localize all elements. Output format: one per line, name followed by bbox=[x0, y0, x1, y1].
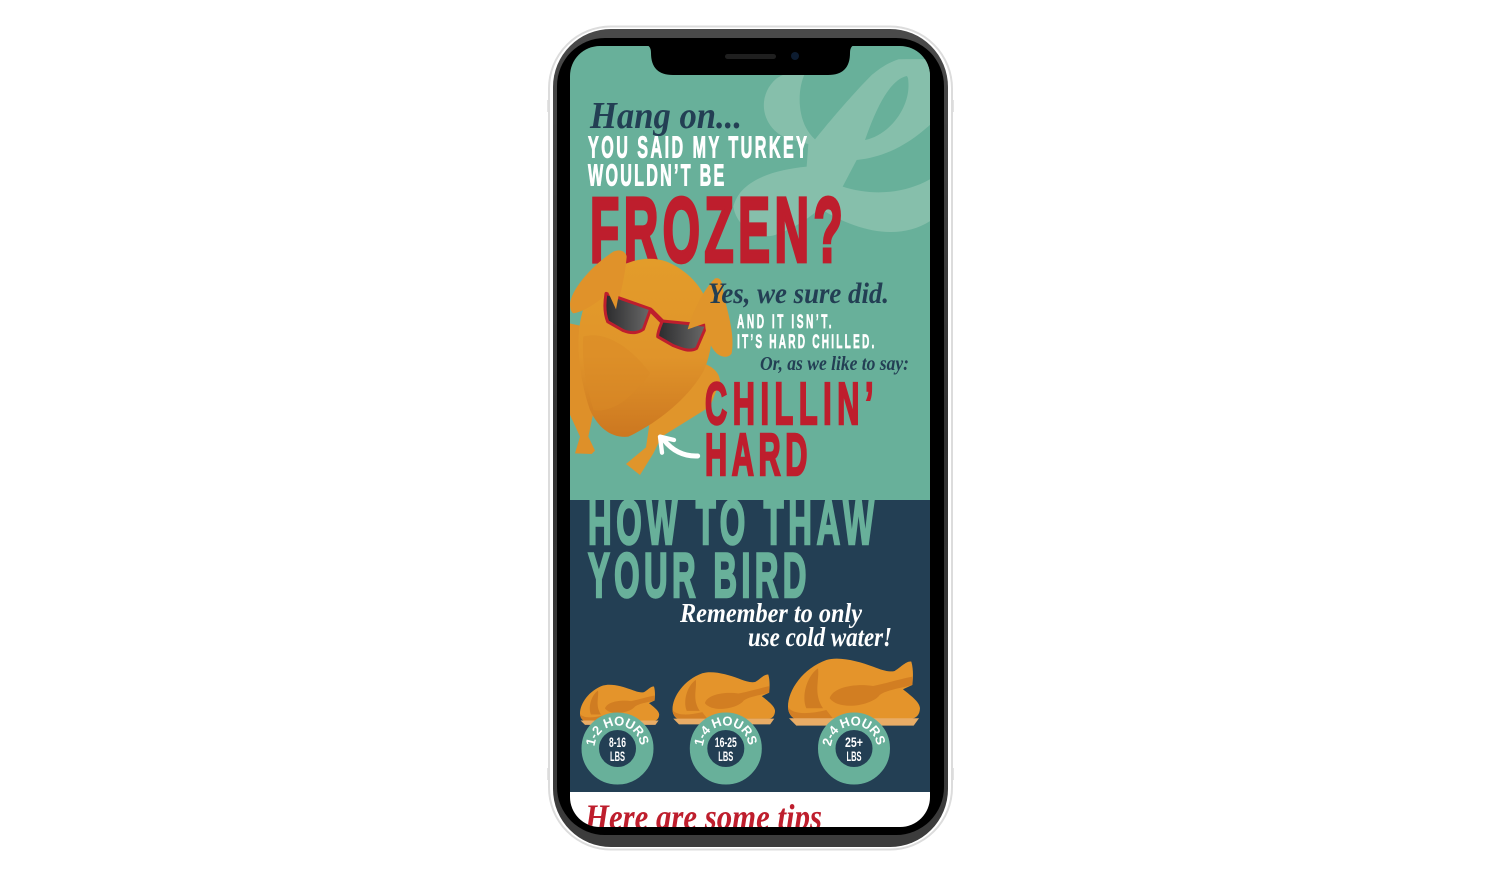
badge: 1-4 hours bbox=[690, 712, 762, 784]
heading: Your bird: YOUR BIRD bbox=[588, 541, 806, 611]
heading: Chillin': CHILLIN’ bbox=[705, 370, 873, 437]
text: use cold water: use cold water! bbox=[748, 622, 892, 652]
side buttons bbox=[547, 100, 954, 780]
turkey 1: 8-16 lbs bbox=[580, 685, 659, 725]
phone body bbox=[547, 26, 954, 850]
camera bbox=[791, 52, 799, 60]
infographic: phone mockup bbox=[547, 26, 954, 850]
turkey right wing bbox=[688, 278, 733, 357]
badge: 1-2 hours: 1-2 HOURS bbox=[586, 716, 648, 746]
heading: Wouldn't be: WOULDN’T BE bbox=[588, 159, 724, 193]
turkey left leg bbox=[569, 323, 595, 454]
heading: Hang on: Hang on... bbox=[589, 95, 742, 137]
turkey 3: 25+ lbs bbox=[788, 659, 920, 726]
text: Remember to only: Remember to only bbox=[679, 598, 863, 628]
navy panel: how to thaw bbox=[570, 500, 930, 792]
heading: You said my turkey: YOU SAID MY TURKEY bbox=[588, 131, 807, 165]
teal background panel bbox=[570, 46, 930, 500]
text: Or, as we like to say: Or, as we like to say: bbox=[760, 353, 909, 375]
illustration: turkey with sunglasses bbox=[569, 250, 733, 475]
badge: 1-2 hours bbox=[582, 712, 654, 784]
badge: 1-4 hours: 1-4 HOURS bbox=[694, 716, 757, 746]
phone notch bbox=[640, 40, 860, 75]
left lens bbox=[605, 293, 651, 333]
bridge bbox=[651, 310, 662, 322]
heading: Frozen: FROZEN? bbox=[590, 179, 843, 282]
notch shape bbox=[640, 40, 860, 75]
turkey body bbox=[578, 259, 712, 437]
turkey left wing bbox=[570, 250, 627, 313]
turkey right leg bbox=[626, 363, 720, 475]
wing tip over glasses bbox=[608, 292, 618, 310]
heading: Here are some tips: Here are some tips bbox=[584, 797, 822, 837]
text: And it isn't: AND IT ISN’T. bbox=[737, 312, 832, 333]
badge: 1-4 hours: 16-25 bbox=[715, 734, 737, 750]
right lens bbox=[658, 321, 707, 350]
watermark script letter L bbox=[733, 43, 932, 236]
metal bezel bbox=[553, 29, 948, 847]
badge: 2-4 hours: 2-4 HOURS bbox=[822, 716, 885, 746]
badge: 1-2 hours: LBS bbox=[610, 748, 625, 764]
text: It's hard chilled: IT’S HARD CHILLED. bbox=[737, 332, 874, 353]
text: Yes, we sure did: Yes, we sure did. bbox=[708, 277, 889, 310]
outer outline bbox=[549, 26, 952, 850]
badge: 2-4 hours: 25+ bbox=[845, 734, 863, 750]
badge: 2-4 hours bbox=[818, 712, 890, 784]
heading: How to thaw: HOW TO THAW bbox=[588, 488, 874, 558]
arrow bbox=[660, 437, 698, 456]
badge: 1-2 hours: 8-16 bbox=[609, 734, 626, 750]
black bezel bbox=[557, 38, 944, 835]
heading: Hard: HARD bbox=[705, 421, 807, 488]
white panel: tips bbox=[570, 792, 930, 828]
sunglasses bbox=[605, 293, 707, 350]
badge: 1-4 hours: LBS bbox=[718, 748, 733, 764]
badge: 2-4 hours: LBS bbox=[846, 748, 862, 764]
turkey 2: 16-25 lbs bbox=[672, 672, 775, 724]
body shading bbox=[583, 335, 650, 410]
speaker bbox=[725, 54, 776, 59]
screen bbox=[570, 46, 930, 827]
